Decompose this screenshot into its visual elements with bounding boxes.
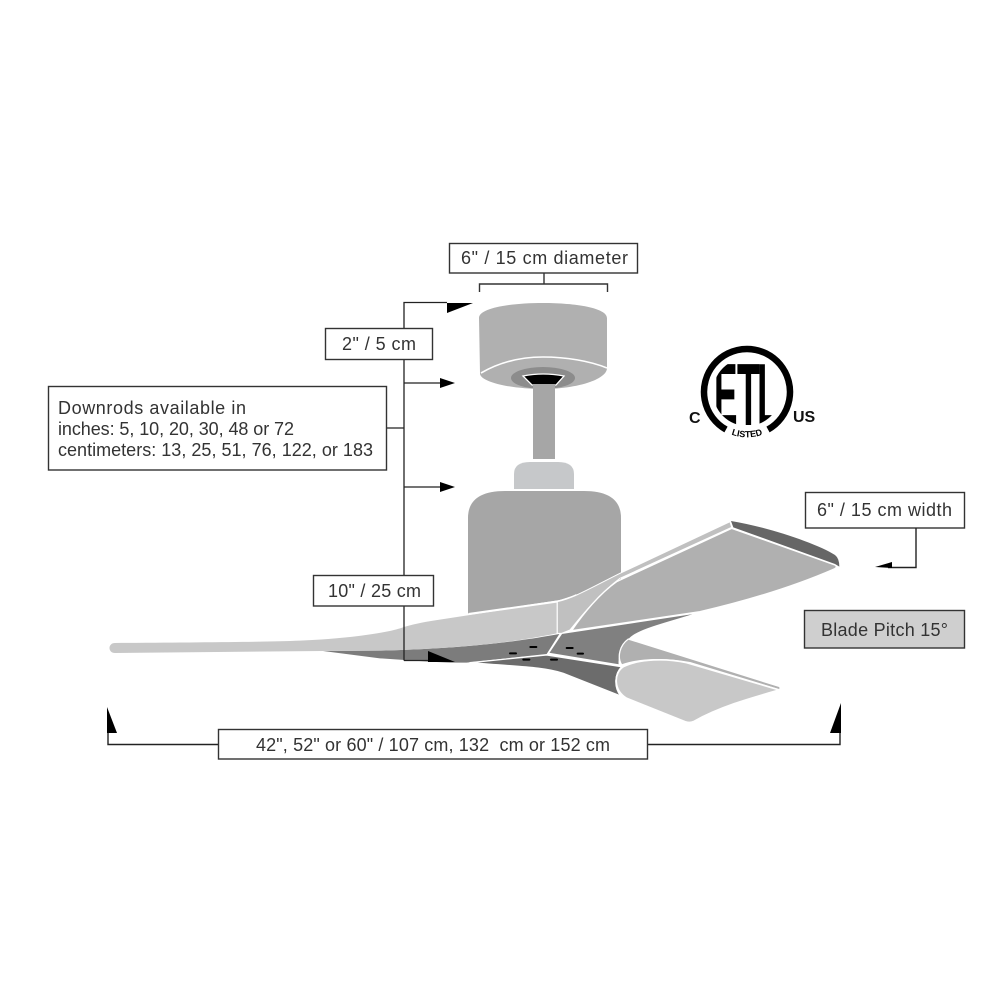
left blade xyxy=(110,602,557,653)
logo LISTED: LISTED xyxy=(732,428,762,438)
span dimension xyxy=(107,703,841,759)
blade width label xyxy=(806,492,964,568)
label: 10 inch: 10" / 25 cm xyxy=(328,581,421,601)
span arrow right xyxy=(830,703,841,733)
diameter label: 6" / 15 cm diameter xyxy=(461,248,628,268)
hub underside left xyxy=(323,634,559,663)
label: 2 inch xyxy=(326,328,432,360)
label: 10 inch xyxy=(314,576,434,606)
blade width arrow xyxy=(875,562,892,568)
logo letters: L xyxy=(757,347,780,445)
canopy xyxy=(479,303,607,389)
arrow bottom xyxy=(428,651,455,662)
blade pitch label: Blade Pitch 15° xyxy=(821,620,948,640)
coupling xyxy=(514,462,574,489)
lower blade upper face xyxy=(619,639,780,690)
blade neck xyxy=(557,522,732,633)
blade pitch label xyxy=(804,610,964,648)
blade width label: 6" / 15 cm width xyxy=(817,500,952,520)
downrods text box: inches: 5, 10, 20, 30, 48 or 72 xyxy=(58,419,294,439)
blades and hub xyxy=(110,521,839,722)
span label xyxy=(218,730,648,759)
fan illustration xyxy=(110,303,839,722)
logo letters: E xyxy=(714,346,737,445)
ETL listed logo xyxy=(689,346,816,438)
arrow middle xyxy=(440,378,455,388)
downrods text box: centimeters: 13, 25, 51, 76, 122, or 183 xyxy=(58,440,373,460)
downrods text box xyxy=(48,386,386,470)
hub underside right xyxy=(548,612,700,665)
ceiling fan dimension diagram xyxy=(48,242,966,760)
upper blade dark edge xyxy=(731,521,839,567)
lower blade xyxy=(616,660,779,722)
mounting screws xyxy=(509,646,584,661)
label: 2 inch: 2" / 5 cm xyxy=(342,334,416,354)
logo ring xyxy=(704,349,790,430)
logo C: C xyxy=(689,410,701,427)
downrod xyxy=(533,384,555,459)
hub underside lower xyxy=(470,655,622,696)
span label: 42", 52" or 60" / 107 cm, 132 cm or 152 cm xyxy=(256,735,610,755)
span arrow left xyxy=(107,707,117,733)
upper right blade xyxy=(572,528,836,631)
diameter label xyxy=(450,244,638,292)
arrow lower xyxy=(440,482,455,492)
logo letters: T xyxy=(737,347,760,445)
downrods text box: Downrods available in xyxy=(58,398,246,418)
motor housing xyxy=(468,491,621,614)
arrow top xyxy=(447,303,473,313)
height dimension lines and arrows xyxy=(387,302,473,662)
logo letters xyxy=(716,364,772,425)
logo US: US xyxy=(793,409,816,426)
